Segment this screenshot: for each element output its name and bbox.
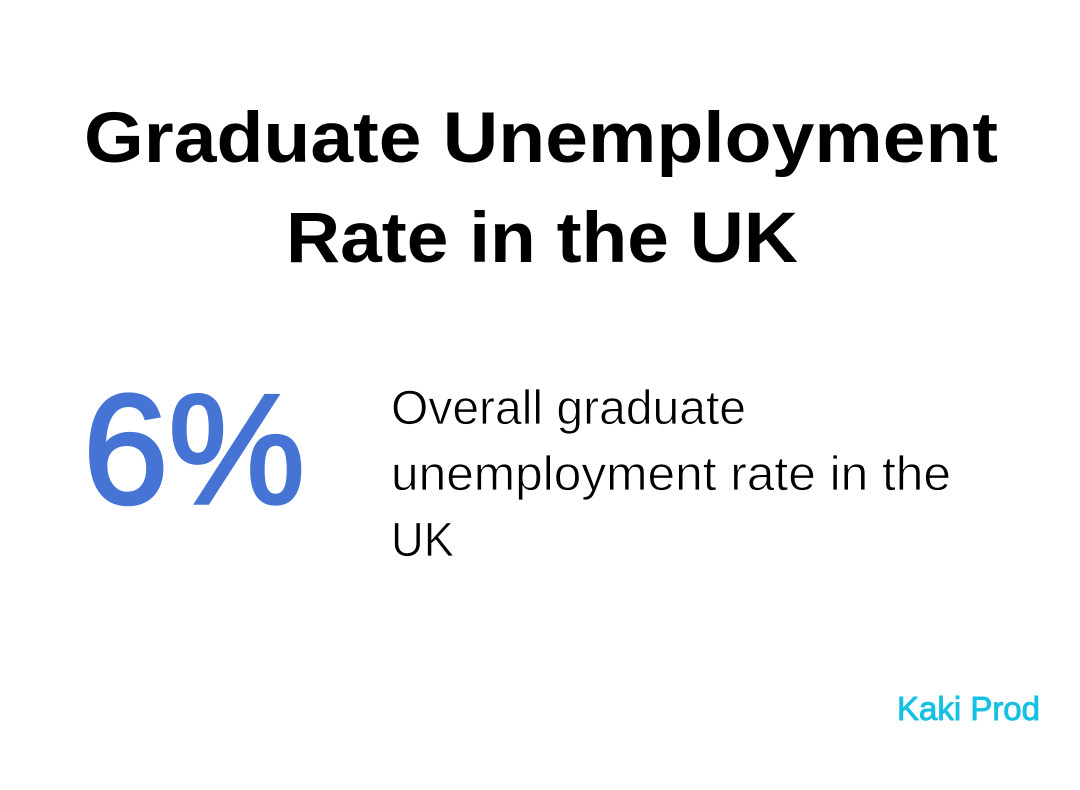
title: Graduate Unemployment	[84, 99, 998, 178]
statistic description	[391, 382, 951, 567]
logo: Kaki Prod: Kaki Prod	[897, 690, 1040, 727]
statistic description: unemployment rate in the	[391, 448, 951, 501]
big statistic: 6%: 6%	[83, 363, 305, 537]
statistic description: Overall graduate	[391, 382, 746, 435]
title	[84, 99, 998, 278]
statistic description: UK	[391, 514, 454, 567]
title: Rate in the UK	[286, 199, 798, 278]
